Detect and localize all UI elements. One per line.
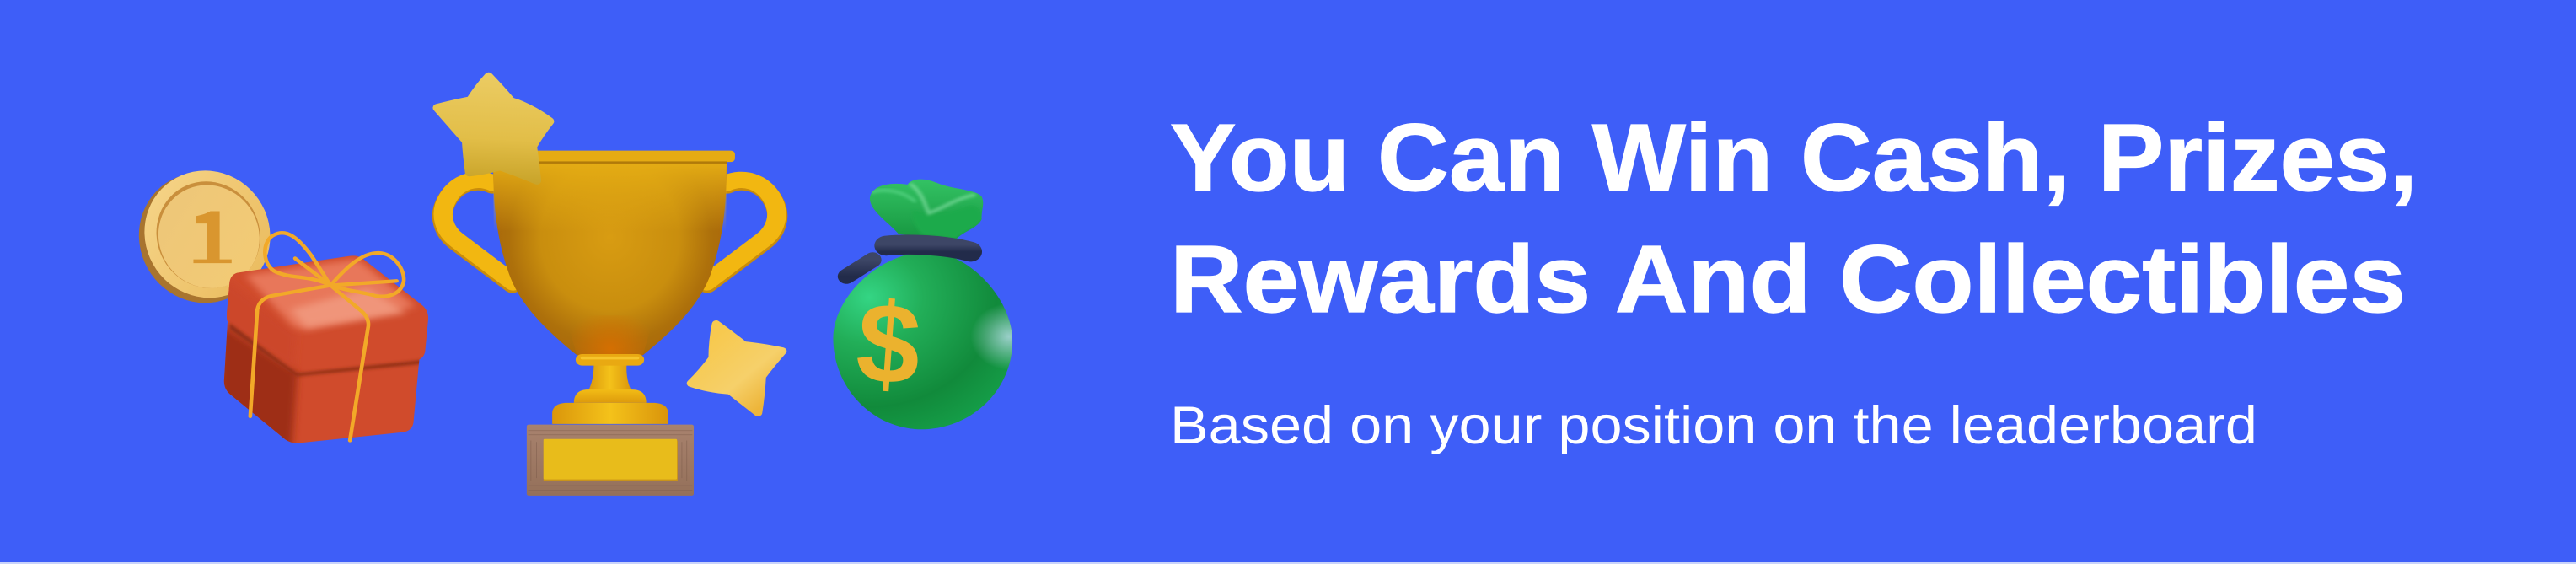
title: Rewards And Collectibles [1170, 226, 2406, 332]
bag tie [886, 244, 970, 252]
icon: small star right of trophy [691, 324, 782, 413]
title [1170, 105, 2418, 332]
gift string [250, 233, 404, 440]
title: You Can Win Cash, Prizes, [1170, 105, 2418, 211]
bag body [833, 252, 1012, 429]
gift body shading [219, 252, 432, 448]
coin numeral: 1 [186, 177, 237, 293]
trophy cup [493, 161, 727, 355]
icon: money bag [833, 175, 1012, 429]
trophy handles [443, 180, 777, 284]
dollar sign: $ [853, 278, 925, 410]
plaque [544, 440, 678, 481]
wood plinth [527, 425, 694, 496]
bag ruffle [870, 179, 983, 239]
icon: gold coin [138, 170, 270, 303]
icon: trophy [443, 151, 777, 496]
subtitle: Based on your position on the leaderboard [1170, 396, 2257, 455]
icon: star top-left of trophy [437, 76, 550, 180]
trophy rim [485, 151, 735, 162]
trophy base [574, 389, 647, 403]
trophy stem [588, 363, 632, 392]
bag tail [846, 260, 872, 277]
icon: gift box [219, 233, 432, 448]
